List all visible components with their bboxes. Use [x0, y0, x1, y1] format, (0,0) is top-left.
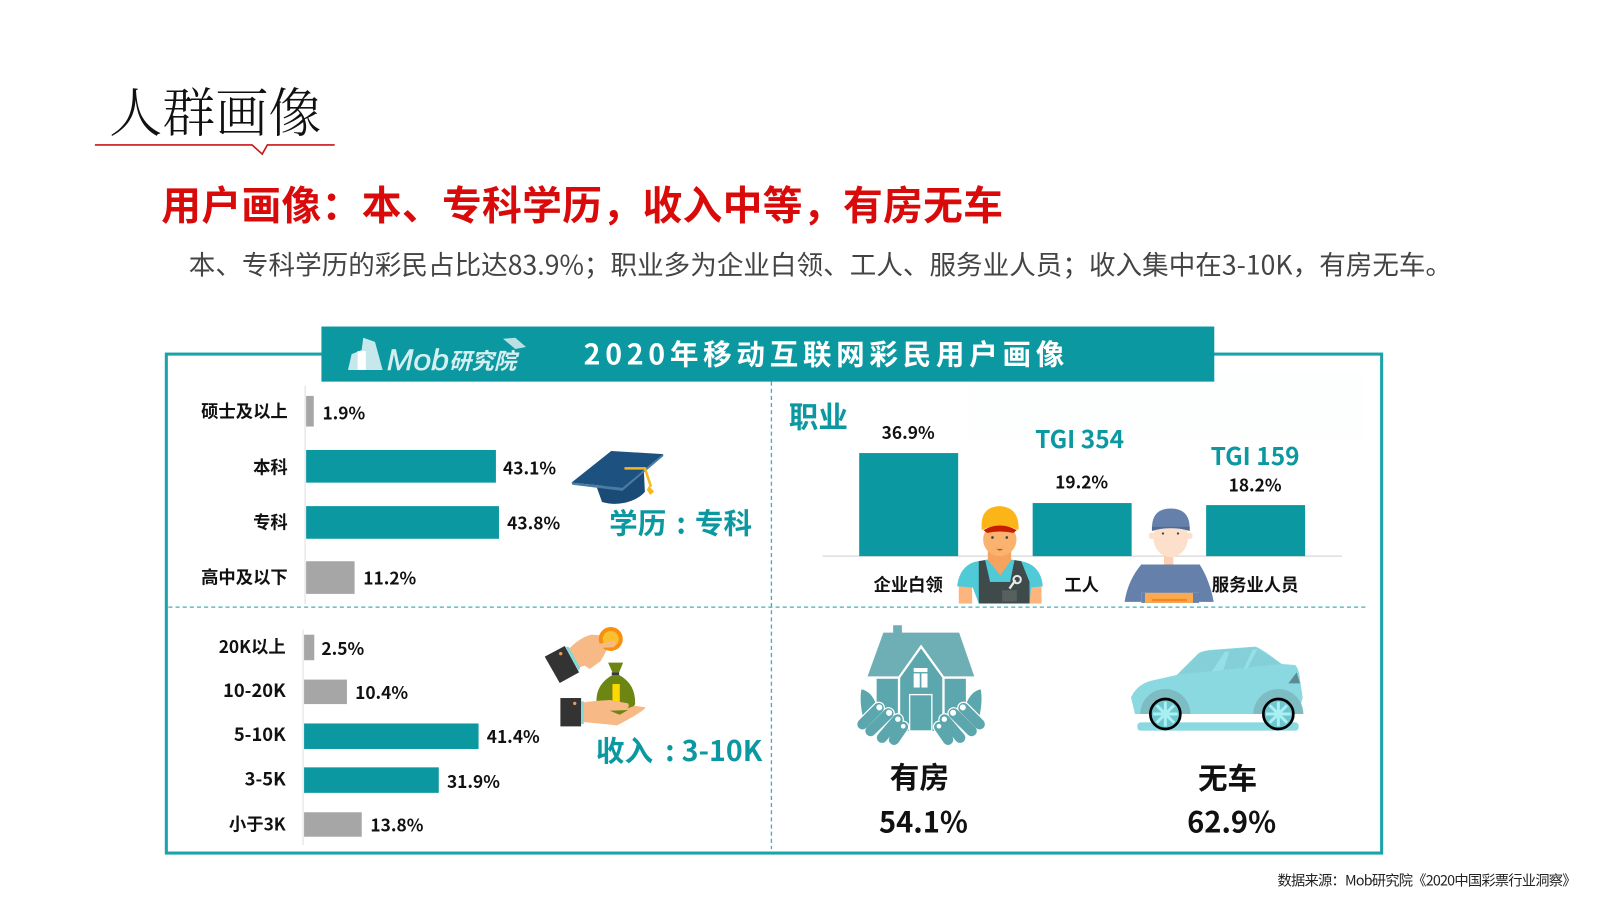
bar: master and above: 1.9% [322, 399, 366, 424]
bar: workers [1033, 421, 1132, 596]
bar: above 20K: 20K以上 [219, 633, 286, 658]
label: own house: 有房 [890, 754, 949, 797]
bar: 5-10K [234, 721, 540, 749]
value: own house: 54.1% [879, 800, 968, 842]
bar: service staff: 18.2% [1229, 471, 1282, 496]
bar: 3-5K: 3-5K [245, 766, 286, 792]
bar: 3-5K [245, 766, 500, 793]
bar: bachelor: 本科 [253, 453, 288, 478]
bar: 10-20K [223, 677, 408, 704]
bar: master and above [201, 396, 366, 427]
icon: hands with coin and money bag [545, 627, 645, 726]
occupation heading: 职业 [789, 394, 848, 437]
summary text: 本、专科学历的彩民占比达83.9%；职业多为企业白领、工人、服务业人员；收入集中在3-10K，有房无车。 [189, 243, 1452, 282]
bar: office workers: 36.9% [882, 419, 935, 444]
income takeaway: 3-10K [682, 729, 763, 770]
bar: 10-20K: 10.4% [355, 679, 408, 704]
bar: college [253, 506, 560, 539]
bar: workers: 19.2% [1055, 468, 1108, 493]
education takeaway: 专科 [695, 502, 752, 543]
bar: office workers [859, 419, 958, 596]
icon: service worker [1125, 508, 1214, 603]
bar: service staff: TGI 159 [1211, 438, 1300, 473]
icon: house held by hands [861, 625, 982, 740]
panel: income chart [219, 630, 540, 845]
faint background patch [969, 373, 1363, 439]
panel: house ownership [861, 625, 982, 842]
income takeaway: 收入 [596, 729, 653, 770]
bar: college: 专科 [253, 509, 288, 534]
Mob logo: Mob [387, 344, 449, 377]
bar: high school and below [201, 561, 417, 594]
bar: workers: TGI 354 [1035, 421, 1124, 456]
education takeaway: 学历 [609, 502, 666, 543]
Mob logo: 研究院 [449, 344, 520, 376]
red headline: 用户画像：本、专科学历，收入中等，有房无车 [161, 174, 1003, 231]
title: 人群画像 [109, 72, 321, 148]
bar: high school and below: 高中及以下 [201, 564, 288, 589]
panel: education chart [201, 386, 560, 604]
bar: workers: 工人 [1064, 571, 1099, 596]
bar: bachelor: 43.1% [503, 454, 556, 479]
education takeaway: : [677, 502, 686, 543]
panel: car ownership [1131, 647, 1303, 842]
income takeaway: : [665, 729, 675, 770]
bar: 3-5K: 31.9% [447, 768, 500, 793]
bar: below 3K: 小于3K [229, 811, 286, 836]
bar: service staff: 服务业人员 [1212, 571, 1298, 596]
bar: office workers: 企业白领 [874, 571, 943, 596]
bar: 10-20K: 10-20K [223, 677, 286, 703]
bar: below 3K [229, 811, 424, 837]
bar: above 20K [219, 633, 365, 660]
bar: bachelor [253, 450, 556, 483]
icon: graduation cap [571, 451, 663, 504]
bar: 5-10K: 5-10K [234, 721, 286, 747]
panel: occupation chart [789, 394, 1342, 596]
data source: 数据来源：Mob研究院《2020中国彩票行业洞察》 [1278, 870, 1577, 891]
banner [321, 327, 1214, 382]
label: no car: 无车 [1198, 755, 1257, 798]
bar: college: 43.8% [507, 510, 560, 535]
panel dividers [168, 382, 1365, 849]
Mob logo [348, 338, 526, 377]
banner title: 2020年移动互联网彩民用户画像 [584, 332, 1065, 373]
bar: high school and below: 11.2% [363, 565, 417, 590]
icon: worker [957, 506, 1043, 604]
bar: master and above: 硕士及以上 [201, 397, 288, 422]
value: no car: 62.9% [1187, 800, 1276, 842]
bar: 5-10K: 41.4% [487, 723, 540, 748]
bar: service staff [1206, 438, 1305, 596]
title underline with notch [95, 145, 335, 154]
icon: car [1131, 647, 1303, 731]
bar: below 3K: 13.8% [370, 812, 424, 837]
bar: above 20K: 2.5% [321, 635, 365, 660]
panel: infographic frame [166, 354, 1382, 853]
